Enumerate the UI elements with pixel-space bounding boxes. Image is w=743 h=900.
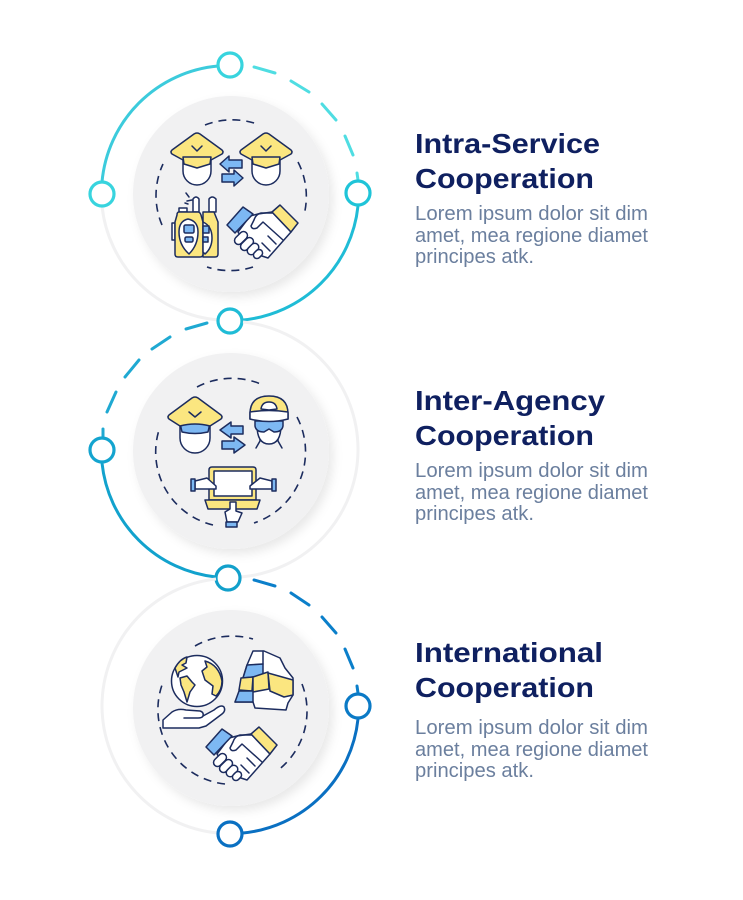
body text: amet, mea regione diamet — [415, 482, 648, 504]
heading: Intra-Service — [415, 128, 600, 159]
body text: amet, mea regione diamet — [415, 225, 648, 247]
node bottom — [218, 822, 242, 846]
panel: inter-agency diagram — [90, 322, 358, 590]
icon: officer — [168, 397, 222, 453]
icon: exchange arrows — [220, 156, 243, 186]
body text: Lorem ipsum dolor sit dim — [415, 203, 648, 225]
icon: walkie talkies — [172, 193, 218, 257]
disc — [133, 96, 329, 292]
faint ring segment — [102, 579, 218, 833]
heading: Cooperation — [415, 420, 594, 451]
solid arc lower right — [243, 719, 358, 833]
icon: officer right — [240, 133, 292, 185]
node right — [346, 694, 370, 718]
node left — [90, 182, 114, 206]
node top — [218, 53, 242, 77]
icon: regional map — [235, 651, 293, 710]
heading: International — [415, 637, 603, 668]
icon: soldier with goggles — [250, 396, 288, 448]
icon: exchange arrows — [220, 422, 245, 453]
icon: globe in hand — [163, 656, 225, 728]
text block: inter-agency — [415, 385, 648, 525]
heading: Cooperation — [415, 163, 594, 194]
faint ring segment — [102, 206, 218, 320]
solid arc upper left — [102, 66, 218, 182]
body text: Lorem ipsum dolor sit dim — [415, 717, 648, 739]
body text: Lorem ipsum dolor sit dim — [415, 460, 648, 482]
icon: officer left — [171, 133, 223, 185]
panel: international diagram — [102, 579, 370, 846]
heading: Cooperation — [415, 672, 594, 703]
body text: amet, mea regione diamet — [415, 739, 648, 761]
node left — [90, 438, 114, 462]
dashed inner circle — [156, 120, 306, 271]
dashed arc upper left — [103, 323, 207, 436]
heading: Inter-Agency — [415, 385, 605, 416]
dashed inner circle — [156, 378, 306, 525]
node bottom — [216, 566, 240, 590]
text block: international — [415, 637, 648, 782]
icon: tablet held by hands — [191, 467, 276, 527]
panel: intra-service diagram — [90, 53, 370, 333]
dashed arc upper right — [254, 67, 358, 180]
faint ring segment — [241, 322, 358, 577]
icon: handshake — [227, 205, 298, 260]
node right — [346, 181, 370, 205]
text block: intra-service — [415, 128, 648, 268]
disc — [133, 610, 329, 806]
node bottom — [218, 309, 242, 333]
body text: principes atk. — [415, 760, 534, 782]
body text: principes atk. — [415, 246, 534, 268]
body text: principes atk. — [415, 503, 534, 525]
icon: handshake — [206, 727, 277, 782]
solid arc lower left — [102, 463, 216, 577]
disc — [133, 353, 329, 549]
dashed arc upper right — [254, 580, 358, 693]
solid arc lower right — [243, 206, 358, 320]
dashed inner circle — [158, 636, 307, 784]
